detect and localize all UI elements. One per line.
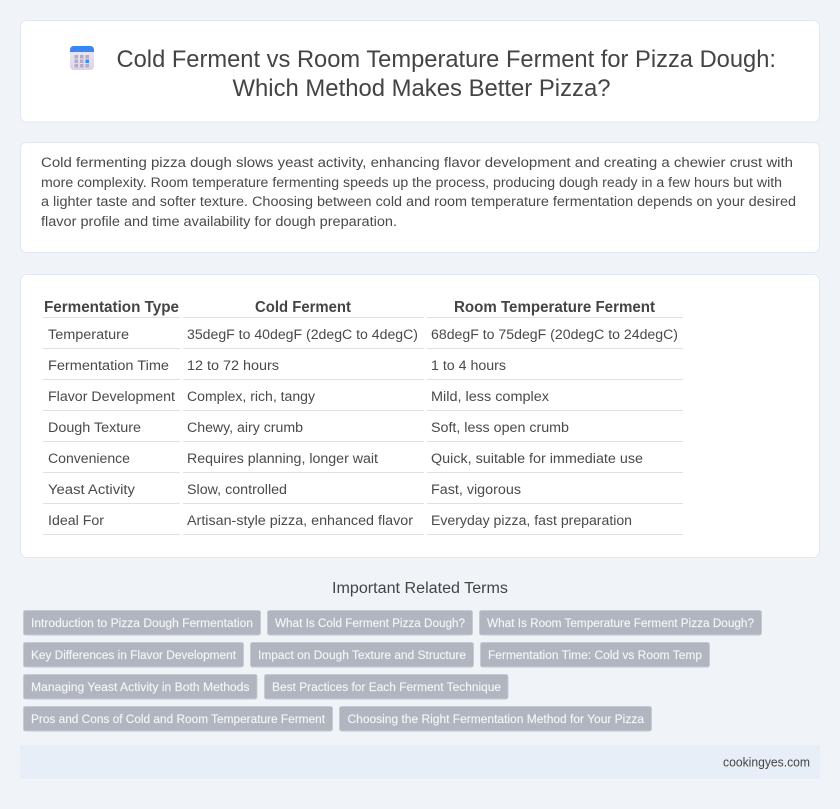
table row: convenience: Quick, suitable for immediate use [431,451,643,467]
table row: ideal for: Ideal For [48,513,104,529]
table row: dough texture [48,420,569,436]
table row: flavor development: Flavor Development [48,389,175,405]
tag [480,610,762,635]
title: Which Method Makes Better Pizza? [232,75,610,102]
table header [44,299,655,316]
panel: comparison table [20,274,820,558]
table row: convenience [48,451,643,467]
table row: temperature: 35degF to 40degF (2degC to 4degC) [187,327,418,343]
tag: Key Differences in Flavor Development [31,648,237,662]
tag [24,642,244,667]
tag [340,706,652,731]
table header: Room Temperature Ferment [454,299,655,316]
table row: temperature: Temperature [48,327,129,343]
table row: flavor development: Mild, less complex [431,389,549,405]
tag: What Is Cold Ferment Pizza Dough? [275,616,465,630]
tag [264,674,508,699]
table row: ideal for: Everyday pizza, fast preparation [431,513,632,529]
tag: Choosing the Right Fermentation Method for Your Pizza [348,712,644,726]
table row: temperature [48,327,678,343]
table row: dough texture: Soft, less open crumb [431,420,569,436]
table header: Fermentation Type [44,299,179,316]
table header: Cold Ferment [255,299,351,316]
tag [268,610,472,635]
tag: What Is Room Temperature Ferment Pizza Dough? [487,616,754,630]
table row: fermentation time: Fermentation Time [48,358,169,374]
table row: fermentation time: 1 to 4 hours [431,358,506,374]
tag: Impact on Dough Texture and Structure [258,648,466,662]
heading: important related terms: Important Related Terms [332,580,508,597]
table row: yeast activity: Fast, vigorous [431,482,521,498]
table row: yeast activity: Slow, controlled [187,482,287,498]
table row: dough texture: Chewy, airy crumb [187,420,303,436]
tag: Introduction to Pizza Dough Fermentation [31,616,253,630]
title [116,46,776,102]
table row: fermentation time [48,358,506,374]
tag [480,642,710,667]
tag [250,642,474,667]
tag: Pros and Cons of Cold and Room Temperature Ferment [31,712,326,726]
table row: flavor development: Complex, rich, tangy [187,389,316,405]
text block: introduction paragraph [41,155,796,230]
table row: yeast activity [48,482,521,498]
text block: introduction paragraph: a lighter taste and softer texture. Choosing between cold and room temperature fermentation depends on your desired [41,194,796,210]
tag: Managing Yeast Activity in Both Methods [31,680,250,694]
tag [24,610,260,635]
panel: title card [20,20,820,122]
tag: Best Practices for Each Ferment Technique [272,680,501,694]
tag list: related terms [24,610,762,731]
table row: flavor development [48,389,549,405]
text block: introduction paragraph: flavor profile and time availability for dough preparation. [41,214,397,230]
table row: ideal for: Artisan-style pizza, enhanced flavor [187,513,413,529]
tag [24,706,332,731]
table row: temperature: 68degF to 75degF (20degC to 24degC) [431,327,678,343]
table row: convenience: Requires planning, longer wait [187,451,378,467]
table row: yeast activity: Yeast Activity [48,482,136,498]
table row: ideal for [48,513,632,529]
tag: Fermentation Time: Cold vs Room Temp [488,648,702,662]
panel: introduction [20,142,820,252]
footer bar [20,745,820,779]
text block: introduction paragraph: more complexity. Room temperature fermenting speeds up the process, producing dough ready in a few hours but with [41,175,782,191]
text block: introduction paragraph: Cold fermenting pizza dough slows yeast activity, enhancing flavor development and creating a chewier crust with [41,155,793,171]
title: Cold Ferment vs Room Temperature Ferment for Pizza Dough: [116,46,776,73]
icon: calendar [70,46,94,70]
footer bar: cookingyes.com [723,756,810,770]
table row: fermentation time: 12 to 72 hours [187,358,279,374]
table row: convenience: Convenience [48,451,130,467]
table row: dough texture: Dough Texture [48,420,141,436]
tag [24,674,257,699]
